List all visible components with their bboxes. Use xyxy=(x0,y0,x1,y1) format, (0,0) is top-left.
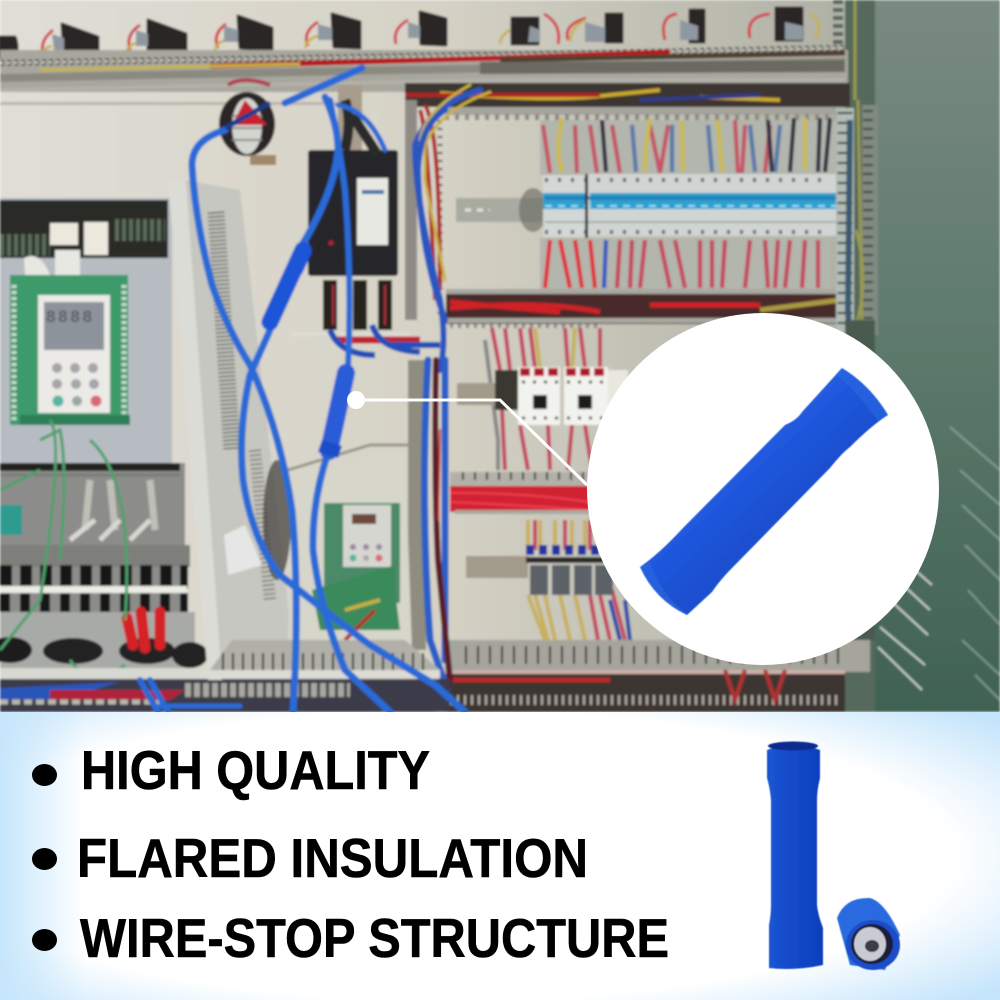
current transformer ring xyxy=(219,80,276,165)
upper right wire duct xyxy=(405,83,850,117)
callout dot xyxy=(347,391,365,409)
callout line xyxy=(356,400,587,485)
feature: flared insulation: FLARED INSULATION xyxy=(77,827,588,889)
top cable trunking xyxy=(0,48,848,105)
lower branch wires xyxy=(545,240,818,288)
bottom feature panel xyxy=(0,712,1000,1000)
wiring bundle xyxy=(415,85,490,690)
control board xyxy=(10,275,130,425)
contactors xyxy=(495,367,628,425)
middle wire duct xyxy=(445,289,845,326)
blue wires xyxy=(140,68,465,712)
photo: electrical cabinet xyxy=(0,0,1000,730)
din rail 3 xyxy=(466,556,528,578)
bottom right duct xyxy=(445,640,870,712)
wire backdrop xyxy=(540,120,835,290)
butt connector on wire, lower xyxy=(318,373,346,458)
bottom left stripe xyxy=(0,679,450,712)
din rail 2 xyxy=(457,383,512,405)
butt connector on wire, upper xyxy=(270,245,312,322)
cabinet door on the right xyxy=(845,0,1000,712)
callout circle xyxy=(587,313,939,665)
right vertical ducts xyxy=(836,0,878,640)
molded case breaker xyxy=(308,100,398,330)
left cabinet interior xyxy=(0,420,208,679)
miniature circuit breakers xyxy=(543,174,836,238)
lower slotted duct xyxy=(200,640,440,678)
top row sensors xyxy=(0,8,819,58)
product photo: two butt connectors xyxy=(767,742,900,970)
keypad xyxy=(38,295,110,413)
small connector xyxy=(837,898,900,970)
relays and colored wires xyxy=(526,520,630,640)
red wires under breaker xyxy=(290,325,440,355)
upper branch wires xyxy=(543,118,830,173)
left vertical trunking xyxy=(405,100,446,730)
feature: wire-stop structure: WIRE-STOP STRUCTURE xyxy=(80,907,669,969)
keypad: 8888 xyxy=(46,307,92,326)
second inverter xyxy=(288,445,412,650)
din rail xyxy=(456,188,547,232)
butt connector close-up xyxy=(640,368,888,615)
feature: high quality: HIGH QUALITY xyxy=(81,739,430,801)
contactor section wires xyxy=(485,328,600,470)
inner door panel xyxy=(168,180,292,680)
left drive: grey housing xyxy=(0,198,172,470)
red wire bundle and duct xyxy=(450,472,590,514)
breaker trunk xyxy=(338,85,362,155)
